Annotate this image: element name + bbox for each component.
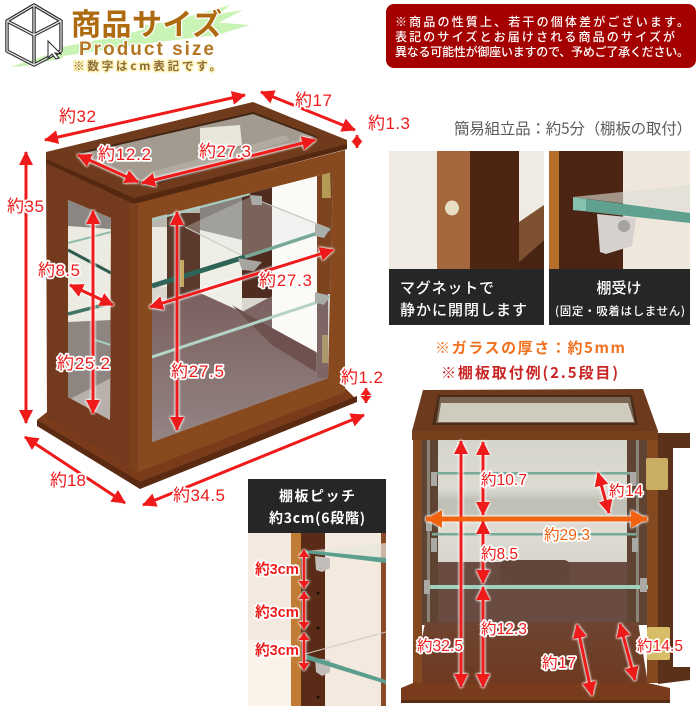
dimension labels: front view: 約32.5: [417, 637, 463, 655]
dimension labels: front view: 約12.3: [481, 620, 527, 638]
photo panel: shelf bracket: (固定・吸着はしません): [555, 303, 685, 319]
door: [658, 433, 690, 684]
panel: shelf pitch: 約3cm(6段階): [269, 508, 365, 528]
dimension labels: main cabinet: 約34.5: [173, 486, 225, 505]
main cabinet photo: [37, 102, 357, 489]
base: [37, 386, 357, 488]
dimension labels: main cabinet: 約25.2: [57, 354, 110, 373]
dimension labels: front view: 約14.5: [637, 637, 683, 655]
dimension labels: main cabinet: 約8.5: [38, 261, 80, 280]
floor: [413, 622, 648, 684]
pitch header: [248, 479, 386, 533]
front view cabinet photo: [401, 389, 690, 703]
top lid: [46, 102, 347, 204]
photo panel: shelf bracket: [549, 151, 690, 325]
dimension labels: front view: 約8.5: [481, 545, 518, 563]
pitch labels: 約3cm: [255, 561, 299, 578]
dimension labels: main cabinet: 約27.5: [171, 362, 224, 381]
dimension labels: main cabinet: 約18: [50, 471, 86, 490]
dimension labels: front view: 約17: [542, 654, 576, 672]
caption: [549, 269, 690, 325]
dimension labels: main cabinet: 約1.3: [368, 114, 410, 133]
note: cm notation: ※数字はcm表記です。: [73, 58, 221, 74]
dimension labels: main cabinet: 約27.3: [199, 142, 251, 161]
posts: [413, 440, 422, 683]
notice panel: [386, 4, 696, 68]
lid: [412, 389, 658, 431]
dimension labels: main cabinet: [7, 91, 410, 505]
pitch arrows: [303, 550, 305, 588]
dimension labels: front view: [417, 471, 683, 672]
subtitle: Product size: Product size: [79, 39, 214, 60]
dimension labels: front view: 約14: [609, 482, 643, 500]
hinges: [646, 458, 668, 490]
dimension labels: main cabinet: 約35: [7, 197, 44, 216]
pitch photo: [248, 533, 386, 706]
panel: shelf pitch: 棚板ピッチ: [279, 486, 355, 506]
base: [401, 683, 670, 703]
notice panel: 表記のサイズとお届けされる商品のサイズが: [395, 28, 675, 45]
front face: [129, 150, 345, 473]
caption: [389, 269, 544, 325]
dimension labels: front view: 約29.3: [544, 526, 590, 544]
title: 商品サイズ: 商品サイズ: [71, 0, 222, 44]
side face: [46, 160, 134, 470]
dimension labels: main cabinet: 約32: [59, 107, 96, 126]
shelves: [435, 472, 634, 474]
photo panel: magnet: マグネットで: [400, 277, 494, 298]
notice panel: ※商品の性質上、若干の個体差がございます。: [395, 13, 689, 30]
photo panel: magnet: [389, 151, 544, 325]
photo panel: shelf bracket: 棚受け: [596, 277, 642, 298]
panel: shelf pitch: [248, 479, 386, 706]
green brush streaks: [10, 5, 250, 67]
icon: cube with cursor: [7, 5, 61, 65]
dimension labels: main cabinet: 約1.2: [341, 368, 383, 387]
dimension labels: main cabinet: 約12.2: [98, 145, 151, 164]
dimension arrows: front view: [426, 441, 647, 695]
dimension labels: front view: 約10.7: [481, 471, 527, 489]
dimension arrows: main cabinet: [25, 92, 366, 505]
side window: [68, 200, 111, 425]
front interior: [150, 170, 340, 450]
dimension labels: main cabinet: 約27.3: [259, 271, 312, 290]
panel: shelf pitch: 約3cm: [255, 604, 299, 621]
panel: shelf pitch: 約3cm: [255, 642, 299, 659]
brackets: [424, 472, 647, 594]
note: shelf example: ※棚板取付例(2.5段目): [441, 362, 618, 383]
note: glass thickness: ※ガラスの厚さ：約5mm: [435, 337, 625, 358]
photo panel: magnet: 静かに開閉します: [400, 299, 527, 320]
heading: product size: [7, 0, 250, 74]
notice panel: 異なる可能性が御座いますので、予めご了承ください。: [395, 43, 689, 60]
dimension labels: main cabinet: 約17: [295, 91, 332, 110]
assembly heading: 簡易組立品：約5分（棚板の取付）: [454, 117, 692, 139]
back wall: [422, 440, 648, 625]
